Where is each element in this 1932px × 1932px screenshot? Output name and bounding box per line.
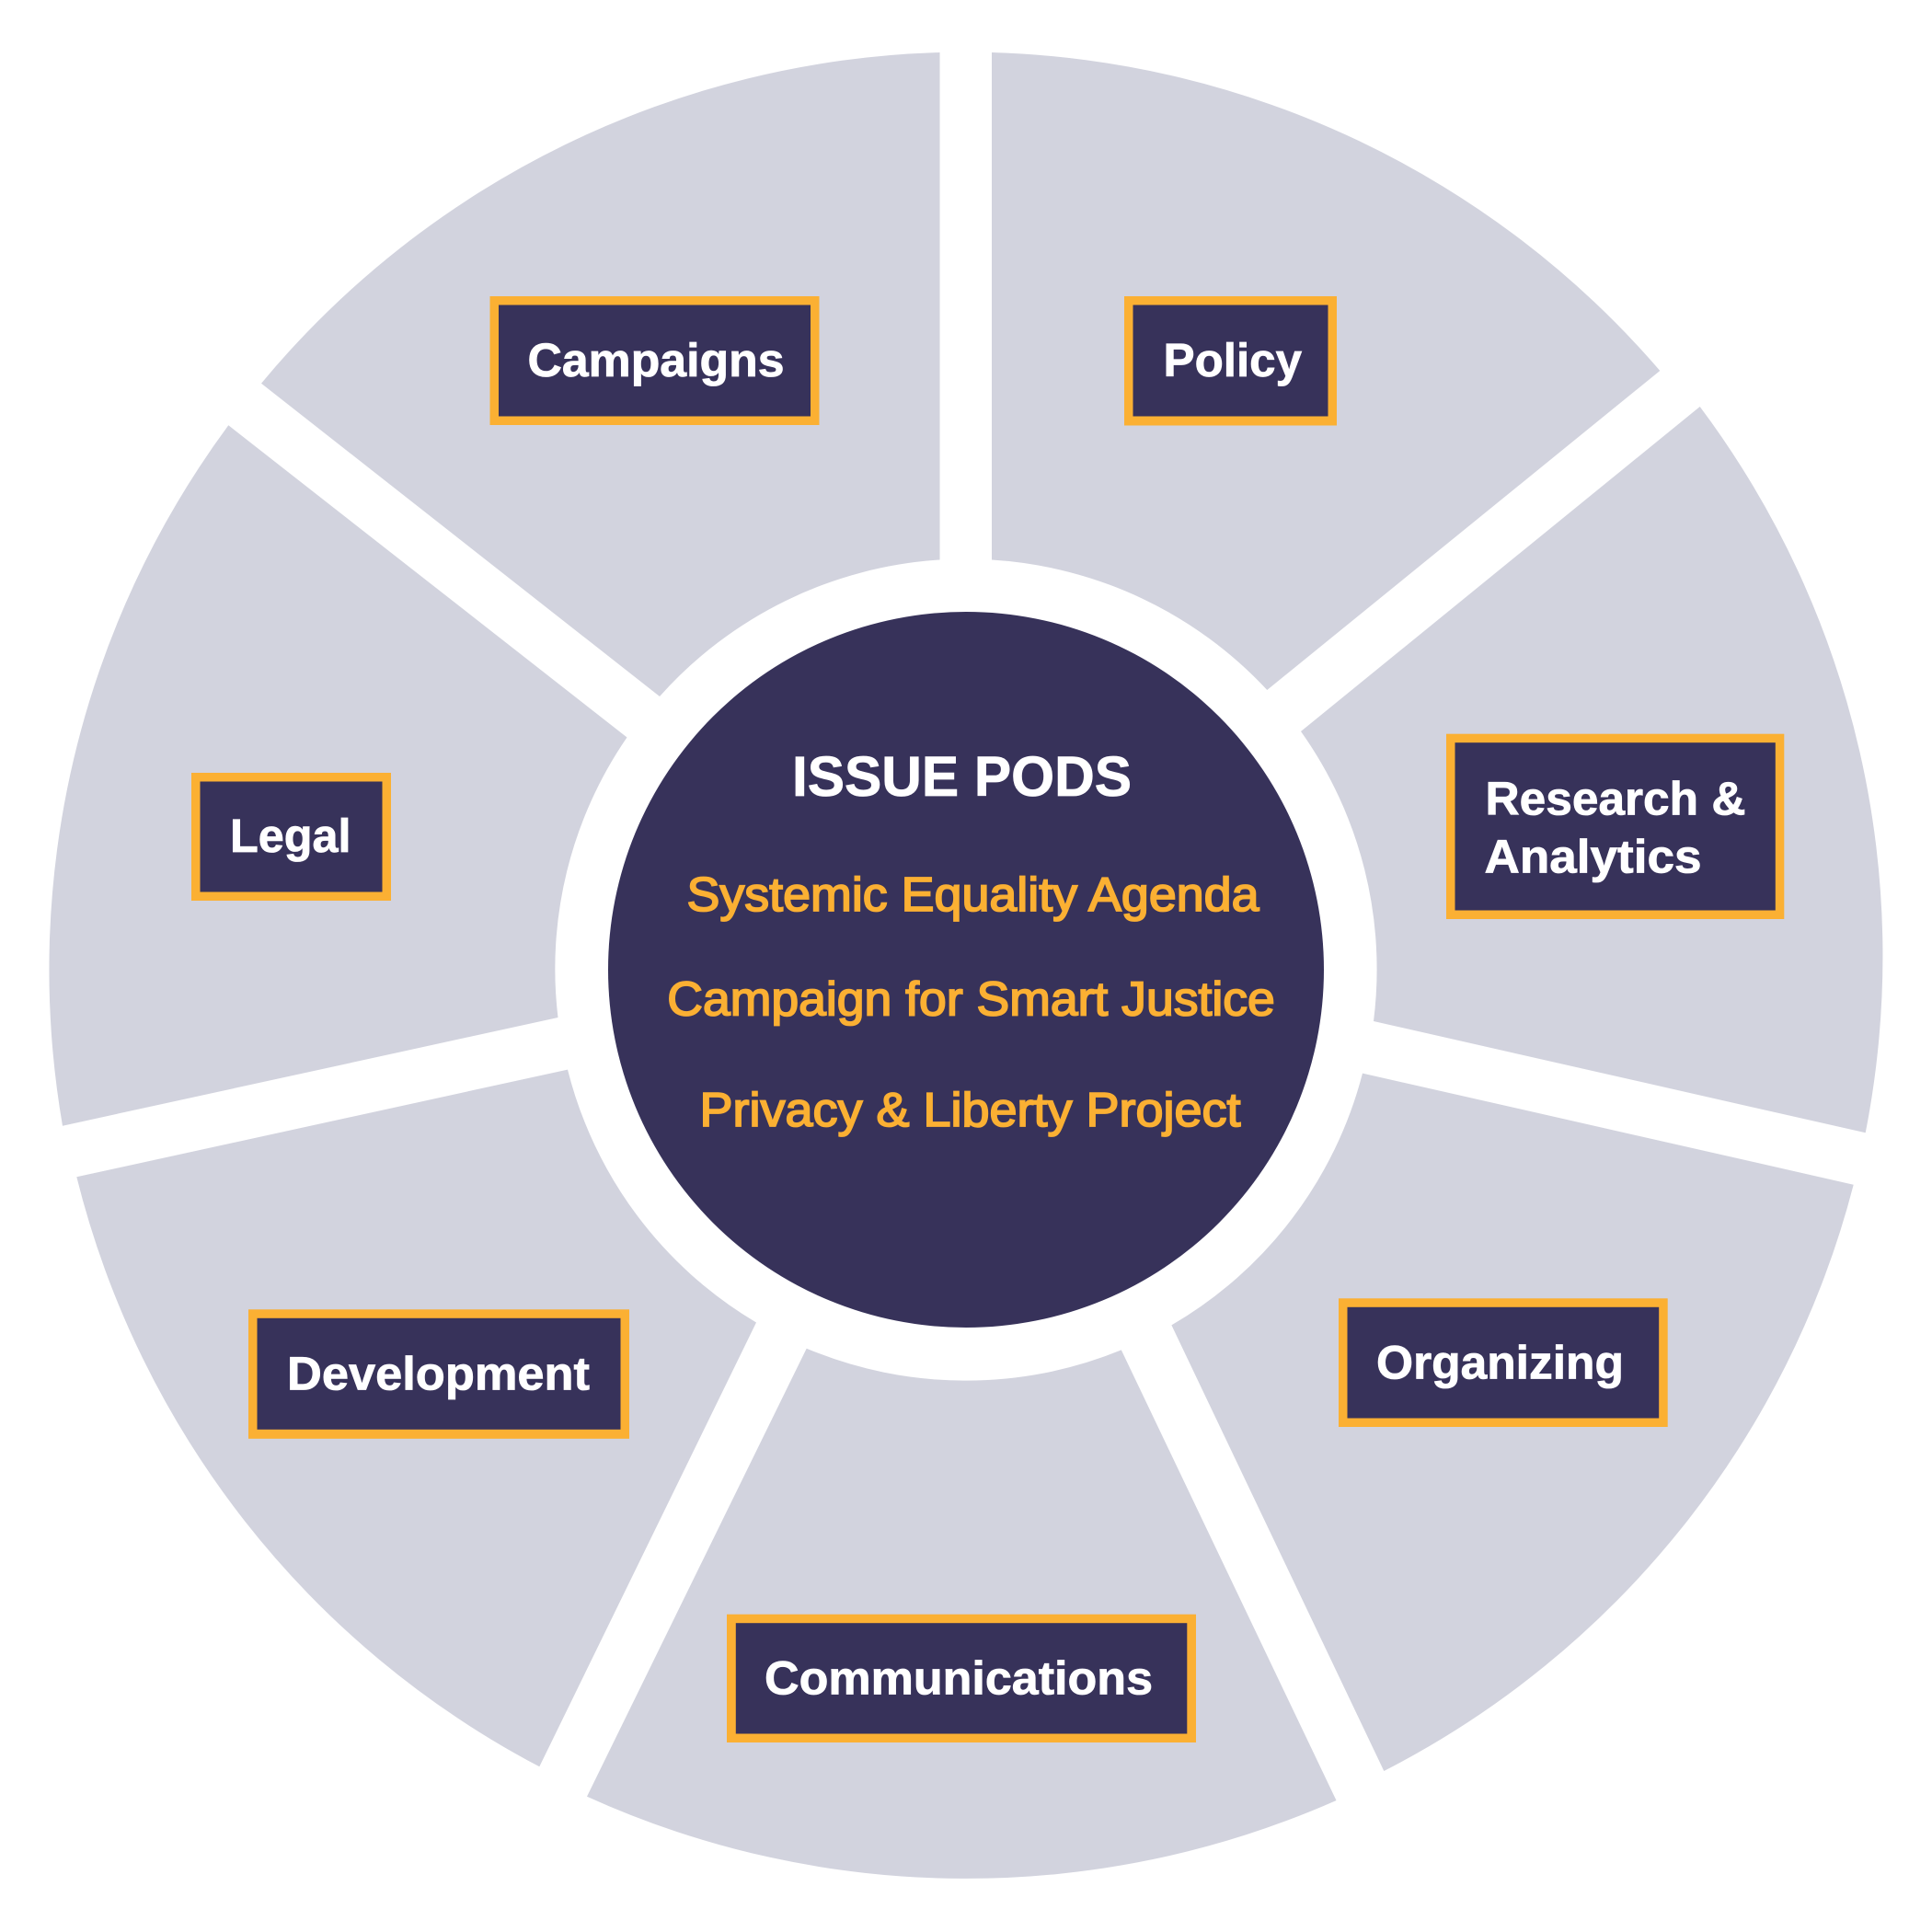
label: Organizing	[1339, 1298, 1668, 1427]
label: Research & Analytics	[1446, 734, 1784, 919]
pod: Systemic Equality Agenda: Systemic Equality Agenda	[686, 868, 1259, 922]
segment: Organizing	[1171, 1074, 1854, 1771]
center circle: Issue Pods	[608, 612, 1324, 1328]
label: Campaigns	[489, 296, 819, 425]
label: Research & Analytics: Research &	[1485, 772, 1746, 824]
label: Research & Analytics: Analytics	[1485, 830, 1702, 882]
segment: Legal	[49, 425, 627, 1126]
center heading: ISSUE PODS	[792, 745, 1132, 808]
segment: Research & Analytics	[1301, 407, 1882, 1133]
segment: Development	[76, 1070, 756, 1766]
label: Development: Development	[287, 1347, 590, 1399]
label: Policy	[1124, 296, 1337, 425]
label: Organizing: Organizing	[1376, 1337, 1624, 1389]
label: Legal: Legal	[230, 810, 351, 862]
label: Communications: Communications	[765, 1652, 1153, 1705]
pod: Privacy & Liberty Project: Privacy & Liberty Project	[699, 1084, 1241, 1137]
label: Policy: Policy	[1163, 334, 1303, 386]
segment: Campaigns	[261, 52, 940, 696]
label: Communications	[727, 1615, 1196, 1742]
label: Campaigns: Campaigns	[528, 334, 784, 386]
label: Development	[248, 1309, 629, 1439]
pod: Campaign for Smart Justice: Campaign for Smart Justice	[667, 972, 1275, 1026]
label: Legal	[191, 773, 391, 901]
segment: Communications	[587, 1349, 1336, 1879]
segment: Policy	[992, 52, 1660, 690]
